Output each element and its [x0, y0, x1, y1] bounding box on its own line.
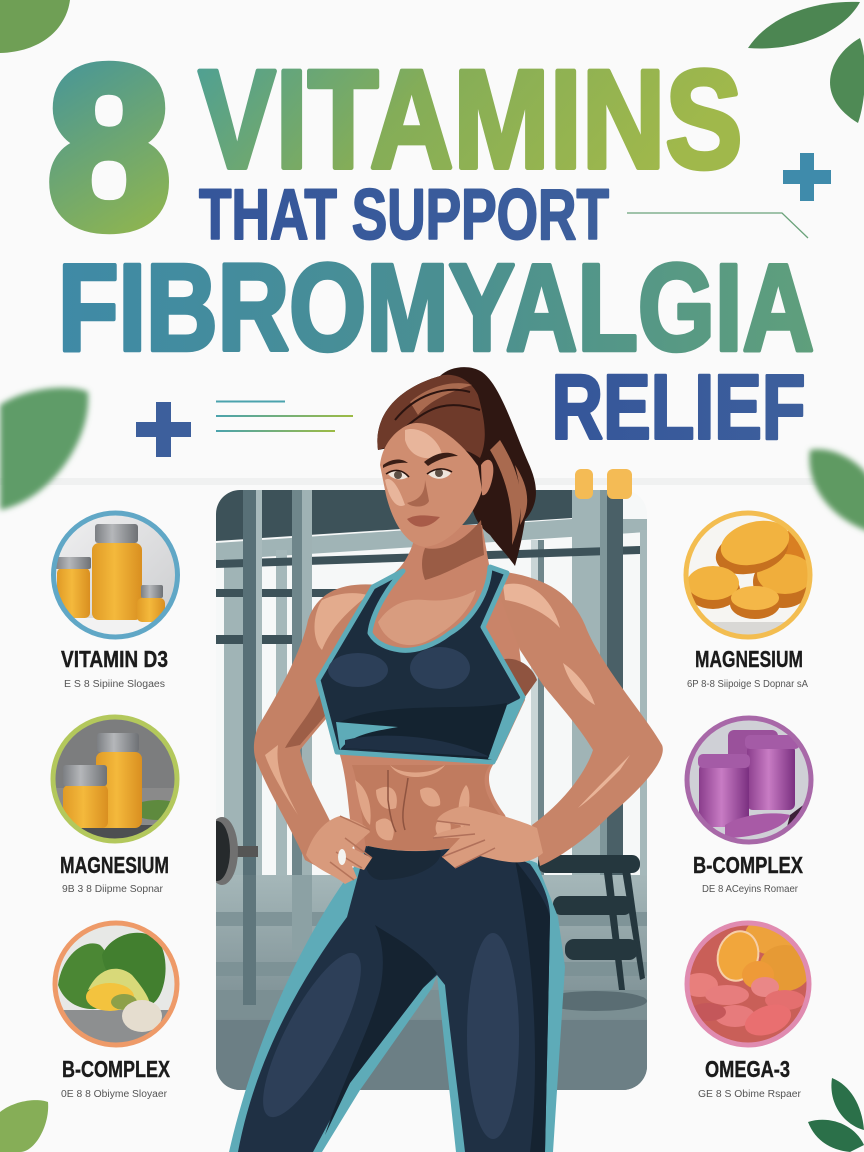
label: MAGNESIUM [60, 852, 169, 878]
person: nose [407, 480, 429, 507]
person: abs [352, 765, 510, 850]
leaf: top right branch [748, 2, 864, 123]
label: VITAMIN D3 [61, 646, 168, 672]
person: sports bra [318, 567, 523, 762]
icon: orange tablets [688, 520, 808, 634]
icon ring [687, 923, 809, 1045]
label: OMEGA-3 [705, 1056, 790, 1082]
caption: GE 8 S Obime Rspaer [698, 1089, 802, 1100]
accent line right [627, 213, 808, 238]
title: number 8: 8 [48, 21, 170, 275]
caption: 0E 8 8 Obiyme Sloyaer [61, 1089, 168, 1100]
panel: b-complex card left [50, 920, 185, 1100]
gym: stacked bench [538, 855, 647, 1011]
accent lines left [216, 400, 353, 432]
icon ring [55, 923, 177, 1045]
panel: b-complex card right [685, 715, 815, 895]
caption: DE 8 ACeyins Romaer [702, 884, 799, 895]
leaf: bottom right [808, 1078, 864, 1152]
person: left arm [254, 584, 378, 868]
icon ring [686, 513, 810, 637]
person: hair and ponytail [377, 367, 536, 566]
person: lips [407, 515, 440, 527]
icon: amber bottles [56, 516, 175, 622]
leaf: right blurred [809, 449, 864, 532]
caption: E S 8 Sipiine Slogaes [64, 679, 165, 690]
icon: yellow accent pills [575, 469, 632, 499]
icon: plus left [136, 402, 191, 457]
label: B-COMPLEX [693, 852, 804, 878]
icon ring [54, 513, 178, 637]
icon ring [687, 718, 811, 842]
person: hair top tone [377, 375, 485, 458]
person: eyes [386, 469, 452, 479]
caption: 9B 3 8 Diipme Sopnar [62, 884, 164, 895]
panel: gym background [204, 490, 647, 1090]
person: leggings [229, 846, 565, 1152]
divider band [0, 478, 864, 485]
person: torso and neck [322, 525, 525, 862]
person: right arm highlights [503, 584, 630, 808]
person: eyebrows [383, 453, 458, 468]
icon: plus right [783, 153, 831, 201]
icon: leaves and capsules [58, 926, 174, 1042]
label: B-COMPLEX [62, 1056, 171, 1082]
person: left arm highlights [265, 593, 368, 815]
icon: purple jars [690, 720, 808, 840]
person: ear [481, 460, 493, 495]
icon: amber jars on grey [56, 720, 174, 838]
panel: vitamin D3 card [50, 510, 180, 690]
panel: magnesium card right [680, 510, 817, 690]
person: left hand [306, 816, 372, 884]
label: MAGNESIUM [695, 646, 803, 672]
person: hair strands [395, 390, 480, 428]
person: ponytail highlights [410, 383, 527, 545]
person: right arm [490, 570, 663, 866]
icon: softgel capsules [690, 926, 806, 1042]
person: neck shadow [422, 520, 484, 580]
person: forehead highlight [385, 429, 442, 506]
leaf: left blurred [0, 388, 88, 510]
gym: barbell plate [216, 817, 258, 885]
title: VITAMINS: VITAMINS [198, 40, 742, 198]
leaf: top left [0, 0, 70, 53]
person: fitness woman illustration [229, 367, 663, 1152]
person: face [380, 423, 482, 547]
icon ring [53, 717, 177, 841]
title: THAT SUPPORT: THAT SUPPORT [199, 176, 609, 255]
leaf: bottom left [0, 1100, 48, 1152]
caption: 6P 8-8 Siipoige S Dopnar sA [687, 679, 808, 690]
person: right hand [433, 806, 543, 868]
person: chest skin [378, 590, 476, 645]
panel: magnesium card left [50, 715, 184, 895]
panel: omega-3 card [680, 915, 815, 1100]
